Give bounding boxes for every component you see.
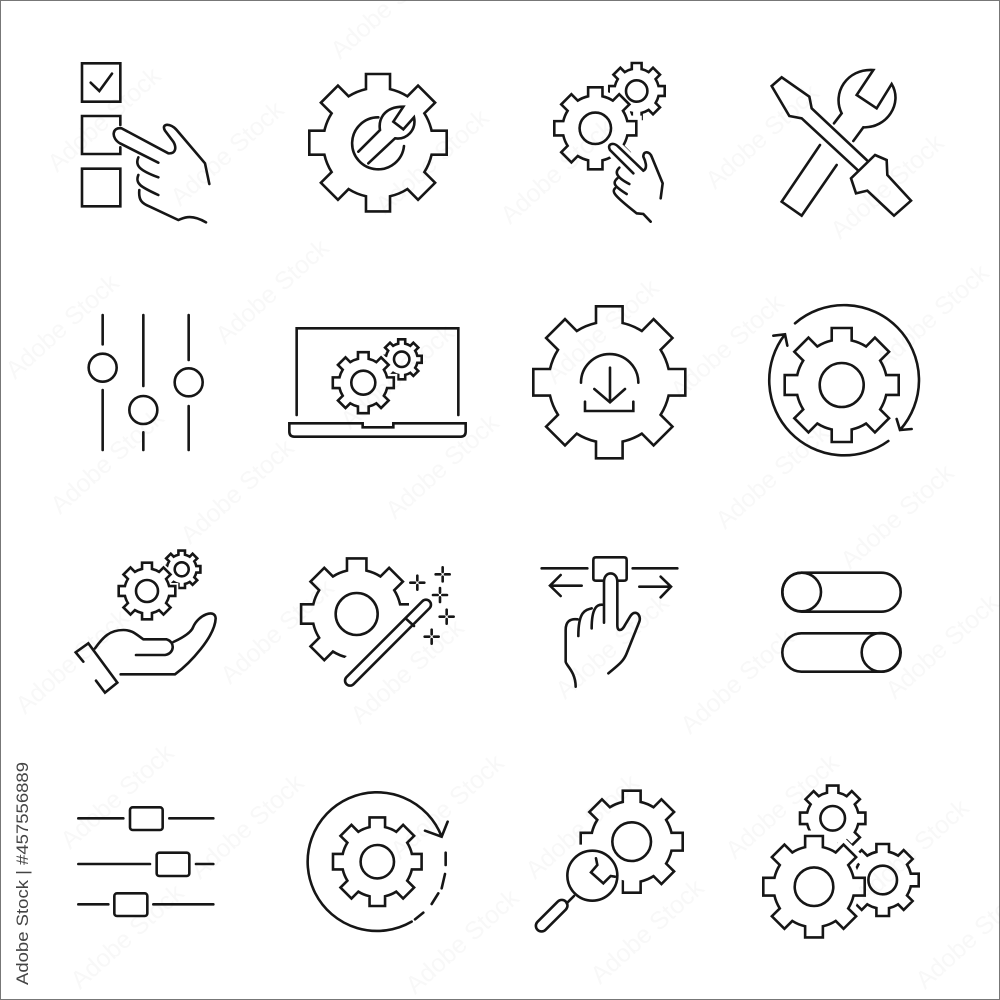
handle: [567, 896, 574, 903]
icon: crossed screwdriver and wrench: [772, 70, 911, 216]
watermark pattern: Adobe Stock: [65, 878, 190, 994]
watermark pattern: Adobe Stock: [665, 288, 790, 404]
lens: [567, 851, 617, 901]
watermark pattern: Adobe Stock: [585, 873, 710, 989]
watermark pattern: Adobe Stock: [870, 258, 995, 374]
wand: [343, 598, 433, 688]
empty box: [82, 169, 120, 206]
watermark pattern: Adobe Stock: [495, 113, 620, 229]
icon: swipe gesture with arrows: [542, 557, 677, 687]
pointing hand: [114, 125, 209, 222]
sparkles: [410, 567, 454, 644]
icon: three meshing gears: [763, 786, 919, 937]
watermark pattern: Adobe Stock: [55, 738, 180, 854]
watermark pattern: Adobe Stock: [520, 768, 645, 884]
large gear: [763, 836, 865, 937]
icon: vertical sliders: [89, 315, 203, 450]
watermark pattern: Adobe Stock: [45, 403, 170, 519]
large gear: [333, 352, 394, 413]
watermark pattern: Adobe Stock: [345, 613, 470, 729]
watermark pattern: Adobe Stock: [720, 748, 845, 864]
small gear: [609, 63, 665, 119]
icon: gear with magic wand: [301, 558, 454, 690]
watermark pattern: Adobe Stock: [540, 273, 665, 389]
wrench: [782, 70, 895, 216]
right gear: [847, 844, 919, 916]
open hand: [76, 613, 216, 693]
watermark pattern: Adobe Stock: [835, 458, 960, 574]
dashed arrow: [308, 792, 448, 931]
circular arrows: [769, 305, 919, 455]
clock hands: [591, 858, 615, 883]
icon: gear with circular arrows: [769, 305, 919, 455]
watermark pattern: Adobe Stock: [710, 418, 835, 534]
screwdriver: [772, 77, 911, 216]
middle box: [82, 116, 120, 154]
watermark pattern: Adobe Stock: [380, 408, 505, 524]
small gear: [163, 551, 200, 588]
watermark pattern: Adobe Stock: [550, 588, 675, 704]
wrench: [352, 107, 414, 169]
watermark pattern: Adobe Stock: [385, 748, 510, 864]
icon: laptop with gears: [289, 328, 466, 437]
laptop: [289, 328, 466, 437]
checked box: [82, 63, 120, 102]
watermark pattern: Adobe Stock: [175, 433, 300, 549]
side credit text: Adobe Stock | #457556889: [13, 762, 32, 985]
icon: hand holding gears: [76, 551, 216, 693]
watermark pattern: Adobe Stock: [400, 883, 525, 999]
icon: checklist with pointing hand: [82, 63, 209, 222]
watermark pattern: Adobe Stock: [42, 61, 167, 177]
watermark pattern: Adobe Stock: [370, 103, 495, 219]
watermark pattern: Adobe Stock: [335, 318, 460, 434]
download arrow: [581, 354, 638, 411]
icon: gear with download: [533, 306, 685, 458]
icon: horizontal sliders: [78, 807, 213, 916]
watermark pattern: Adobe Stock: [850, 793, 975, 909]
icon: toggle switches: [782, 573, 901, 672]
watermark pattern: Adobe Stock: [0, 268, 125, 384]
watermark pattern: Adobe Stock: [185, 768, 310, 884]
small gear: [382, 339, 422, 379]
watermark pattern: Adobe Stock: [825, 128, 950, 244]
large gear: [554, 87, 636, 169]
watermark pattern: Adobe Stock: [700, 78, 825, 194]
watermark pattern: Adobe Stock: [10, 603, 135, 719]
watermark pattern: Adobe Stock: [165, 95, 290, 211]
arrows: [550, 575, 671, 597]
icon: gear with dashed circular arrow: [308, 792, 448, 931]
watermark pattern: Adobe Stock: [675, 623, 800, 739]
icon: magnifier with gear and clock: [534, 791, 683, 934]
hand: [609, 144, 663, 222]
hand: [566, 573, 640, 687]
icon: gear with wrench: [309, 74, 447, 211]
watermark pattern: Adobe Stock: [215, 573, 340, 689]
top gear: [800, 786, 865, 851]
watermark pattern: Adobe Stock: [210, 233, 335, 349]
large gear: [119, 563, 175, 619]
icon: gears with pointing hand: [554, 63, 665, 222]
